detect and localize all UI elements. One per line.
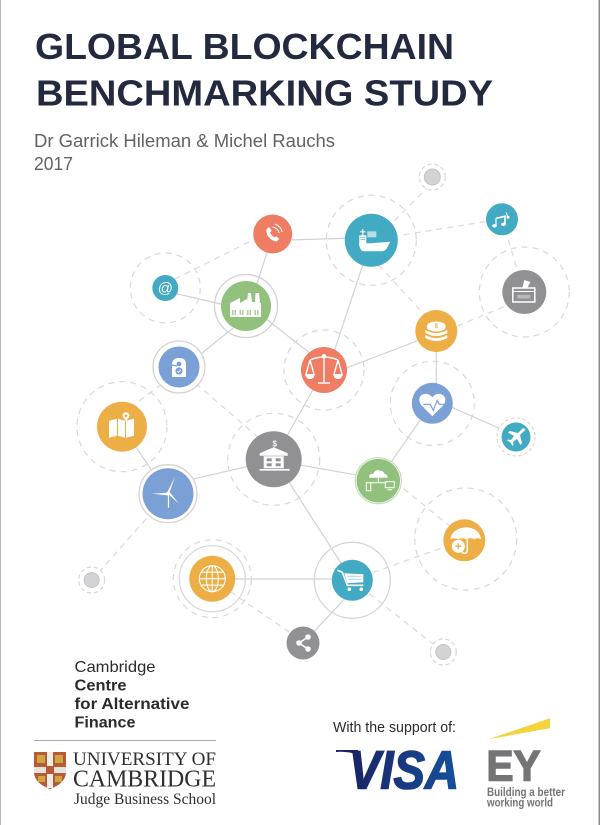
decorative node: grey top (419, 164, 445, 190)
title: GLOBAL BLOCKCHAIN (35, 26, 454, 67)
node: share (286, 626, 320, 660)
node: shopping cart (314, 542, 390, 618)
logo: University of Cambridge Judge Business School: Judge Business School (74, 791, 217, 808)
logo: Cambridge Centre for Alternative Finance: Centre (74, 678, 127, 694)
node: at sign: @ (158, 280, 173, 297)
node: at sign (130, 253, 200, 323)
node: map (77, 382, 167, 472)
node: cloud network (355, 458, 401, 504)
node: factory (214, 274, 278, 338)
node: wind turbine (139, 465, 197, 523)
decorative node: grey bottom (430, 639, 456, 665)
network connections (92, 183, 524, 652)
authors and year: 2017 (34, 154, 73, 174)
title: BENCHMARKING STUDY (36, 72, 493, 114)
node: bank: $ (272, 439, 277, 448)
decorative node: grey left (79, 567, 105, 593)
node: globe (173, 540, 251, 618)
logo: Cambridge Centre for Alternative Finance: Finance (74, 714, 136, 732)
logo: University of Cambridge Judge Business School: CAMBRIDGE (73, 766, 216, 793)
icon: University of Cambridge shield (34, 752, 66, 789)
node: lock hanger (153, 341, 205, 393)
logo: Cambridge Centre for Alternative Finance: Cambridge (74, 659, 156, 676)
node: bank (228, 413, 320, 505)
node: ballot box (479, 247, 569, 337)
logo: EY: EY (486, 742, 540, 790)
node: music notes (486, 203, 518, 235)
node: coins (415, 310, 457, 352)
logo: Cambridge Centre for Alternative Finance: for Alternative (74, 696, 190, 713)
logo: Cambridge Centre for Alternative Finance (74, 659, 190, 732)
logo: EY: working world (486, 798, 553, 810)
authors and year: Dr Garrick Hileman & Michel Rauchs (34, 131, 335, 151)
logo: EY (486, 718, 565, 810)
node: phone (253, 214, 292, 254)
node: heart monitor (390, 361, 474, 445)
logo: Visa: VISA (349, 741, 459, 801)
node: coins: $ (435, 324, 439, 330)
logo: University of Cambridge Judge Business School: UNIVERSITY OF (73, 749, 216, 770)
logo: University of Cambridge Judge Business School (73, 749, 217, 808)
node: scales (284, 330, 364, 410)
node: umbrella (415, 488, 517, 590)
logo: EY: Building a better (487, 787, 565, 799)
authors and year (34, 131, 335, 174)
support label: With the support of: (333, 720, 456, 736)
title (35, 26, 493, 114)
node: plane (497, 418, 535, 456)
node: cargo ship (326, 195, 416, 285)
